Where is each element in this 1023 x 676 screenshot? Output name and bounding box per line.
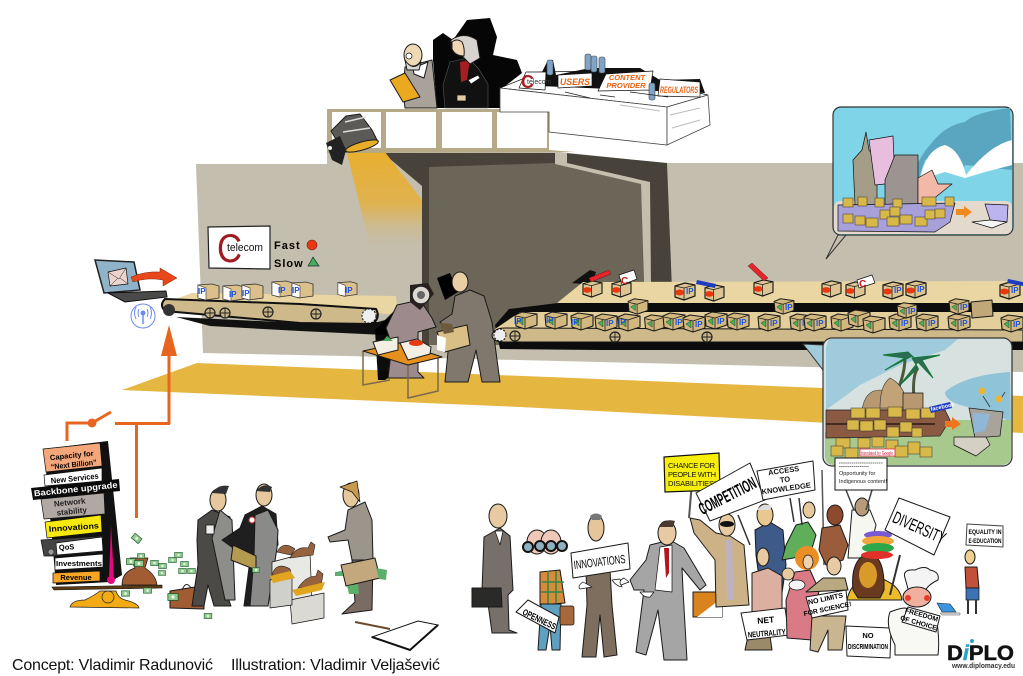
legend: fast and slow — [274, 240, 319, 270]
tan briefcase with money — [231, 545, 260, 572]
sign: indigenous content: Indigenous content! — [839, 479, 887, 485]
sign: OPENNESS — [516, 600, 559, 633]
slow lane boxes: IP — [695, 320, 703, 329]
sign: access to knowledge — [757, 461, 815, 500]
conveyor: fast and slow belts — [492, 270, 1023, 350]
panel: judges and shadow — [390, 18, 522, 108]
sign: no limits for science — [803, 590, 852, 618]
slow lane boxes: IP — [908, 307, 916, 316]
figure: chef — [888, 568, 939, 655]
logo: DIPLO: www.diplomacy.edu — [951, 661, 1015, 670]
slow lane boxes: IP — [785, 303, 793, 312]
panel: stack of priority books — [31, 441, 122, 585]
book: capacity: Capacity for — [49, 449, 94, 462]
book: backbone upgrade: Backbone upgrade — [33, 480, 118, 498]
slow lane boxes: IP — [571, 318, 579, 327]
figure: man with binoculars — [523, 530, 574, 650]
sign: OPENNESS: OPENNESS — [521, 607, 558, 632]
figure: grey bald businessman — [472, 504, 517, 633]
slow lane boxes — [514, 299, 1023, 333]
boxes on telecom belt: IP — [345, 286, 353, 295]
card: USERS — [558, 73, 592, 88]
sign: no discrimination: DISCRIMINATION — [848, 644, 888, 651]
book: QoS — [41, 536, 103, 556]
sign: chance for people with disabilities: CHANCE FOR — [668, 461, 716, 470]
figure: inspector with magnifier — [375, 283, 436, 380]
sign: C telecom: telecom — [227, 242, 263, 254]
label: translated by Google: translated by Google — [861, 451, 893, 457]
card: CONTENT PROVIDER: PROVIDER — [606, 81, 646, 90]
book: investments — [55, 554, 103, 570]
book: revenue — [53, 571, 100, 583]
figure: woman with rainbow hat — [847, 531, 902, 600]
gauge needle — [107, 525, 115, 584]
sign: equality in e-education: EQUALITY IN — [968, 529, 1002, 536]
sign: C telecom — [208, 226, 270, 271]
table with paper stacks — [363, 336, 442, 398]
panel: stakeholder table — [500, 54, 710, 145]
card: CONTENT PROVIDER — [598, 71, 653, 91]
slow lane boxes: IP — [546, 316, 554, 325]
book: innovations — [45, 515, 102, 538]
sign: no limits for science: FOR SCIENCE! — [803, 601, 852, 618]
callout: developing region scene: facebook — [930, 402, 956, 413]
callout: developing region scene — [803, 338, 1012, 466]
logo: DIPLO: DiPLO — [947, 642, 1014, 665]
figure: woman in green dress — [782, 498, 816, 560]
sign: DIVERSITY — [885, 498, 950, 595]
tags on fast boxes: C — [859, 279, 866, 290]
icon: water bottles — [547, 54, 655, 100]
credits: Illustration: Vladimir Veljašević — [231, 657, 440, 674]
slow lane boxes: IP — [675, 318, 683, 327]
book: QoS: QoS — [59, 542, 75, 552]
figure: man offering hand — [328, 481, 373, 614]
boxes on telecom belt: IP — [242, 289, 250, 298]
sign: INNOVATIONS: INNOVATIONS — [573, 552, 626, 572]
book: network stability: stability — [56, 505, 88, 518]
slow lane boxes: IP — [802, 319, 810, 328]
sign: indigenous content — [835, 458, 887, 490]
sign: INNOVATIONS — [571, 543, 630, 578]
card: C telecom: C — [521, 72, 534, 92]
figure: child with glasses — [965, 550, 979, 614]
boxes on telecom belt: IP — [292, 286, 300, 295]
sign: access to knowledge: KNOWLEDGE — [761, 481, 811, 496]
legend: fast and slow: Slow — [274, 258, 304, 270]
boxes on telecom belt: IP — [278, 286, 286, 295]
sign: access to knowledge: TO — [779, 474, 791, 485]
sign: freedom of choice: OF CHOICE — [899, 615, 938, 632]
fast lane boxes: IP — [686, 287, 694, 296]
slow lane boxes: IP — [901, 319, 909, 328]
shadow silhouette — [433, 18, 522, 108]
figure: man in white robe — [846, 490, 876, 558]
boxes on telecom belt: IP — [229, 290, 237, 299]
book: revenue: Revenue — [60, 573, 92, 582]
tunnel — [383, 153, 672, 345]
fast lane boxes: IP — [917, 285, 925, 294]
figure: old scientist — [403, 44, 437, 108]
sign: equality in e-education — [966, 524, 1003, 547]
floor: yellow band — [122, 363, 1023, 433]
figure: scientist — [806, 557, 848, 652]
slow lane boxes: IP — [618, 318, 626, 327]
arrow: orange uplink — [115, 325, 177, 518]
book: innovations: Innovations — [49, 521, 100, 534]
fast lane boxes: IP — [894, 286, 902, 295]
sign: no limits for science: NO LIMITS — [808, 592, 844, 607]
fast lane boxes: IP — [1011, 286, 1019, 295]
slow lane boxes: IP — [960, 319, 968, 328]
sign: freedom of choice — [899, 607, 940, 632]
gantry frame — [327, 109, 575, 153]
conveyor: telecom belt — [162, 293, 400, 335]
figure: tribal man with spear — [819, 470, 848, 565]
sign: NET NEUTRALITY: NET — [757, 614, 775, 626]
slow lane boxes: IP — [606, 319, 614, 328]
slow lane boxes: IP — [816, 319, 824, 328]
slow lane boxes: IP — [717, 317, 725, 326]
label: translated by Google — [860, 449, 895, 457]
figure: man in trench coat — [689, 470, 749, 607]
money bag and banknotes — [121, 533, 212, 619]
icon: blue laptop — [937, 603, 960, 615]
sign: no discrimination: NO — [862, 631, 874, 640]
legend: fast and slow: Fast — [274, 240, 301, 252]
empty sheet and stick — [355, 621, 438, 650]
slow lane boxes: IP — [960, 303, 968, 312]
figure: woman with red hair and baby — [782, 546, 819, 640]
tan case with money — [335, 558, 387, 594]
credits: Concept: Vladimir Radunović — [12, 657, 213, 674]
card: CONTENT PROVIDER: CONTENT — [609, 73, 647, 82]
sign: DIVERSITY: DIVERSITY — [890, 508, 949, 548]
sign: indigenous content: Opportunity for — [839, 471, 876, 477]
credits — [12, 657, 440, 674]
fast lane boxes — [583, 280, 1020, 301]
book: capacity — [43, 443, 102, 472]
tags on fast boxes: C — [621, 276, 628, 287]
orange briefcase — [693, 592, 722, 617]
book: investments: Investments — [56, 559, 102, 568]
figure: judge — [443, 36, 488, 108]
boxes on telecom belt — [198, 281, 357, 301]
sign: COMPETITION — [696, 463, 765, 521]
book: capacity: “Next Billion” — [50, 458, 97, 471]
slow lane boxes: IP — [514, 317, 522, 326]
wall: beige backdrop — [196, 152, 1023, 372]
sign: NET NEUTRALITY — [741, 608, 789, 640]
card: C telecom: telecom — [527, 79, 552, 86]
sign: equality in e-education: E-EDUCATION — [968, 538, 1002, 545]
figure: dark suit businessman — [192, 486, 235, 606]
figure: net neutrality man — [745, 548, 782, 650]
figure: man with innovations sign — [579, 514, 622, 657]
book: network stability — [41, 493, 105, 519]
card: REGULATORS — [658, 79, 700, 97]
book: network stability: Network — [54, 496, 86, 509]
figure: man packing a box — [437, 272, 500, 382]
sign: access to knowledge: ACCESS — [768, 464, 800, 477]
callout: city scene — [826, 107, 1013, 259]
balance scale base — [52, 585, 162, 608]
sign: C telecom: C — [217, 227, 242, 271]
sign: freedom of choice: FREEDOM — [904, 608, 939, 624]
slow lane boxes: IP — [770, 319, 778, 328]
figure: blue suit man — [738, 504, 786, 600]
card: REGULATORS: REGULATORS — [660, 85, 698, 95]
book: new services: New Services — [50, 471, 100, 485]
sign: chance for people with disabilities: PEOPLE WITH — [668, 470, 716, 479]
slow lane boxes: IP — [1013, 320, 1021, 329]
icon: wireless signal — [131, 304, 155, 328]
slow lane boxes: IP — [928, 319, 936, 328]
icon: laptop sending mail — [95, 260, 177, 302]
lamp — [326, 114, 379, 165]
icon: yellow clipboard — [390, 73, 420, 102]
figure: man with empty pockets — [620, 520, 706, 660]
sign: chance for people with disabilities: DISABILITIES! — [668, 479, 716, 488]
slow lane boxes: IP — [739, 318, 747, 327]
server racks with chickens — [270, 542, 325, 624]
switch — [67, 412, 111, 441]
sign: NET NEUTRALITY: NEUTRALITY — [747, 627, 787, 640]
card: C telecom — [519, 72, 552, 92]
light beam from lamp — [347, 143, 422, 255]
sign: COMPETITION: COMPETITION — [696, 474, 759, 519]
sign: no discrimination — [846, 626, 891, 658]
card: USERS: USERS — [560, 77, 590, 87]
brown briefcase — [168, 584, 204, 609]
sign: chance for people with disabilities — [664, 453, 720, 492]
figure: black suit businessman — [222, 484, 278, 606]
tags on fast boxes — [589, 263, 1023, 290]
boxes on telecom belt: IP — [198, 287, 206, 296]
